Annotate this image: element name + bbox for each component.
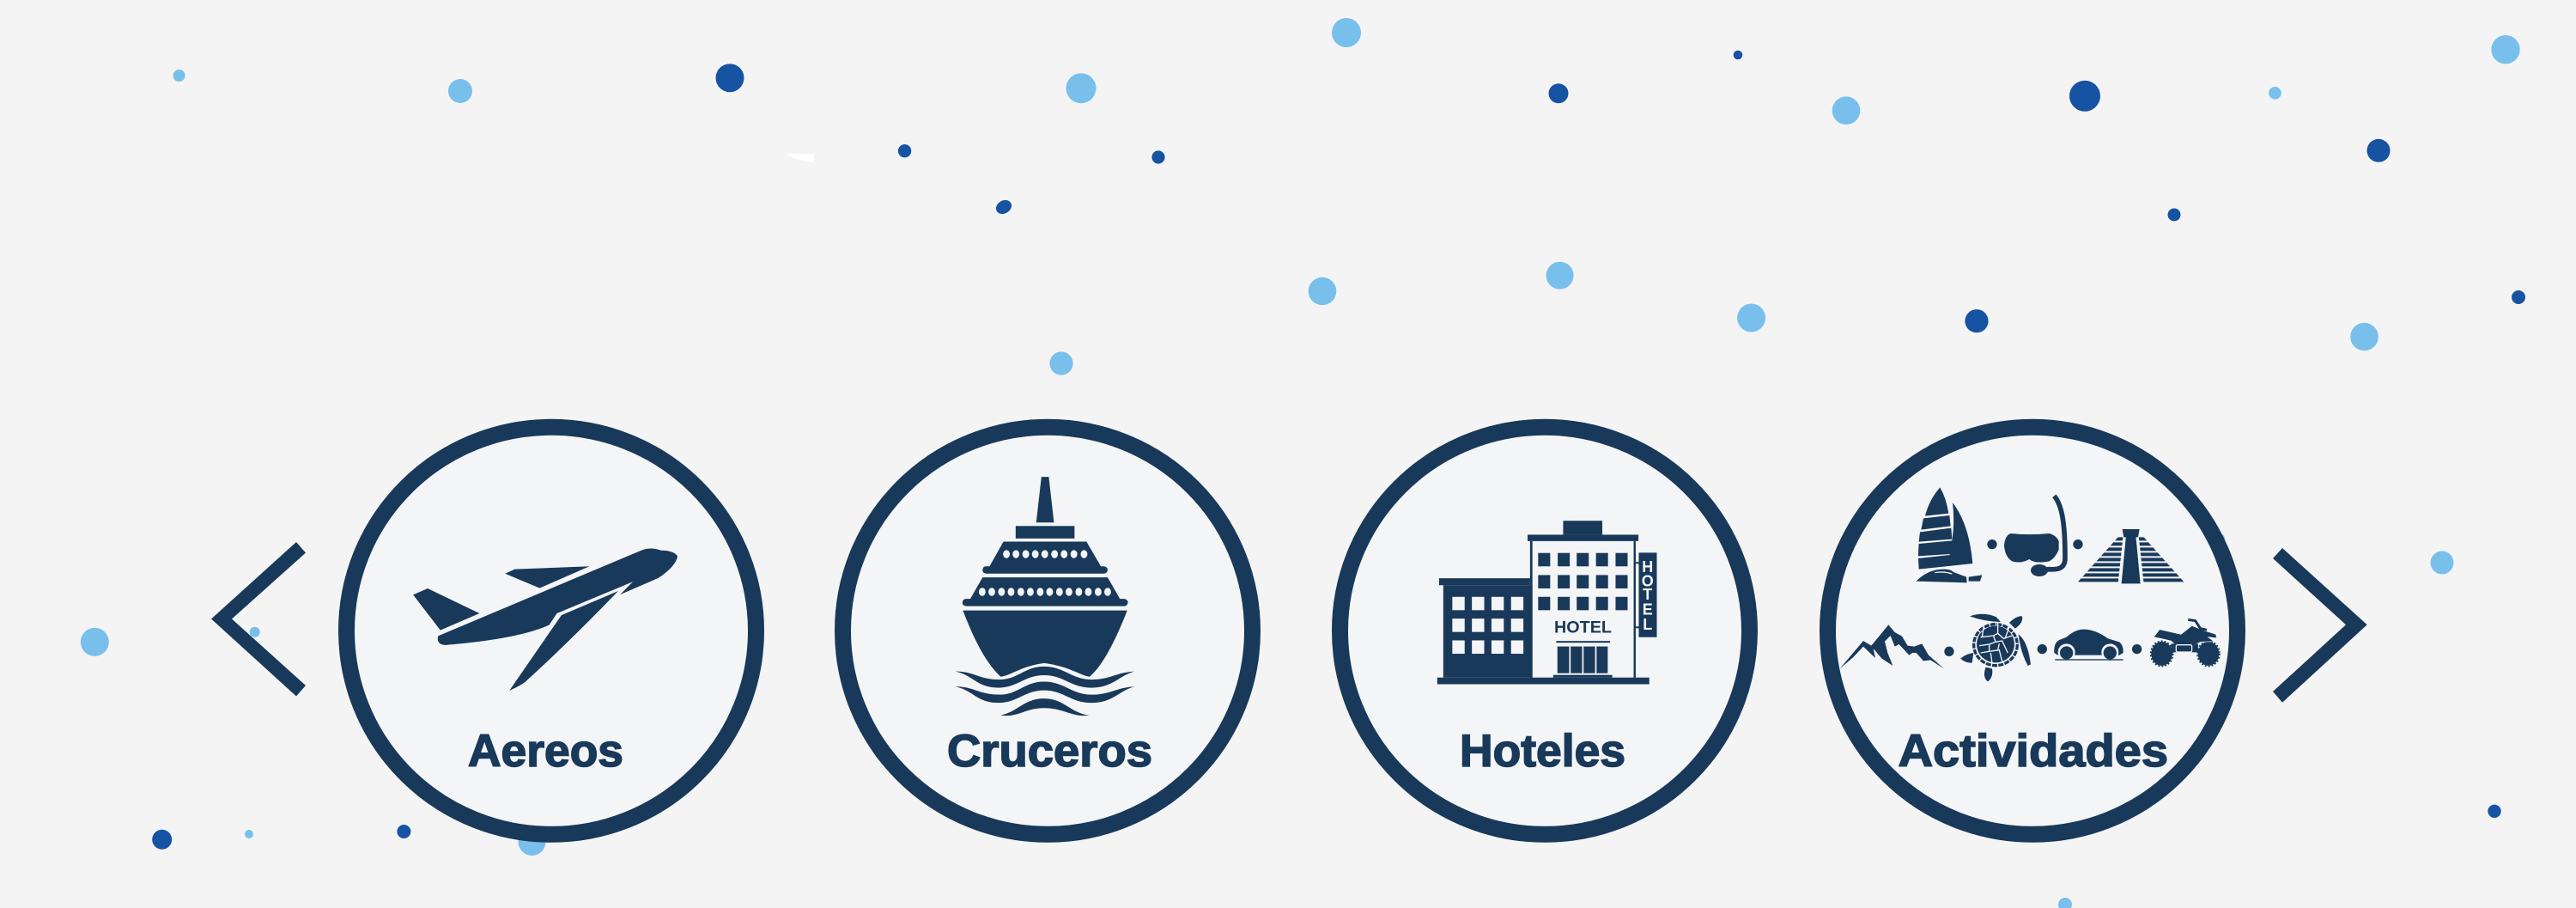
icon: sea turtle — [1960, 614, 2031, 681]
icon: hotel building: L — [1643, 616, 1652, 633]
icon: sailboat — [1917, 487, 1982, 582]
icon: mountains — [1840, 625, 1944, 668]
icons: bottom row — [1840, 614, 2220, 681]
label: Aereos: Aereos — [468, 726, 623, 777]
separator dot — [2132, 644, 2142, 654]
icon: pyramid — [2078, 529, 2184, 583]
circle frame: Cruceros — [843, 427, 1252, 834]
icon: hotel building: T — [1643, 586, 1652, 603]
panel: Actividades — [1827, 427, 2238, 834]
icon: car — [2054, 630, 2123, 661]
separator dot — [2073, 539, 2083, 549]
icon: snorkel mask — [2004, 496, 2065, 576]
circle frame: Aereos — [347, 427, 756, 834]
icon: hotel building: HOTEL — [1554, 619, 1612, 637]
separator dot — [2038, 644, 2047, 654]
arrow: previous — [211, 542, 306, 696]
icon: hotel building: O — [1642, 572, 1654, 589]
arrow: next — [2273, 548, 2367, 703]
label: Cruceros: Cruceros — [947, 726, 1152, 777]
panel: Cruceros — [843, 427, 1252, 834]
icon: airplane — [413, 548, 677, 691]
separator dot — [1944, 647, 1954, 656]
panel: Hoteles — [1340, 427, 1750, 834]
icon: quad bike — [2151, 619, 2220, 667]
panel: Aereos — [347, 427, 756, 834]
separator dot — [1987, 539, 1997, 549]
icon: hotel building — [1437, 521, 1657, 685]
icon: hotel building: E — [1643, 601, 1653, 619]
label: Actividades: Actividades — [1899, 726, 2168, 777]
circle frame: Hoteles — [1340, 427, 1750, 834]
icons: top row — [1917, 487, 2184, 583]
icon: cruise ship — [955, 477, 1134, 716]
circle frame: Actividades — [1827, 427, 2238, 834]
label: Hoteles: Hoteles — [1460, 726, 1625, 777]
icon: hotel building: H — [1642, 558, 1653, 576]
